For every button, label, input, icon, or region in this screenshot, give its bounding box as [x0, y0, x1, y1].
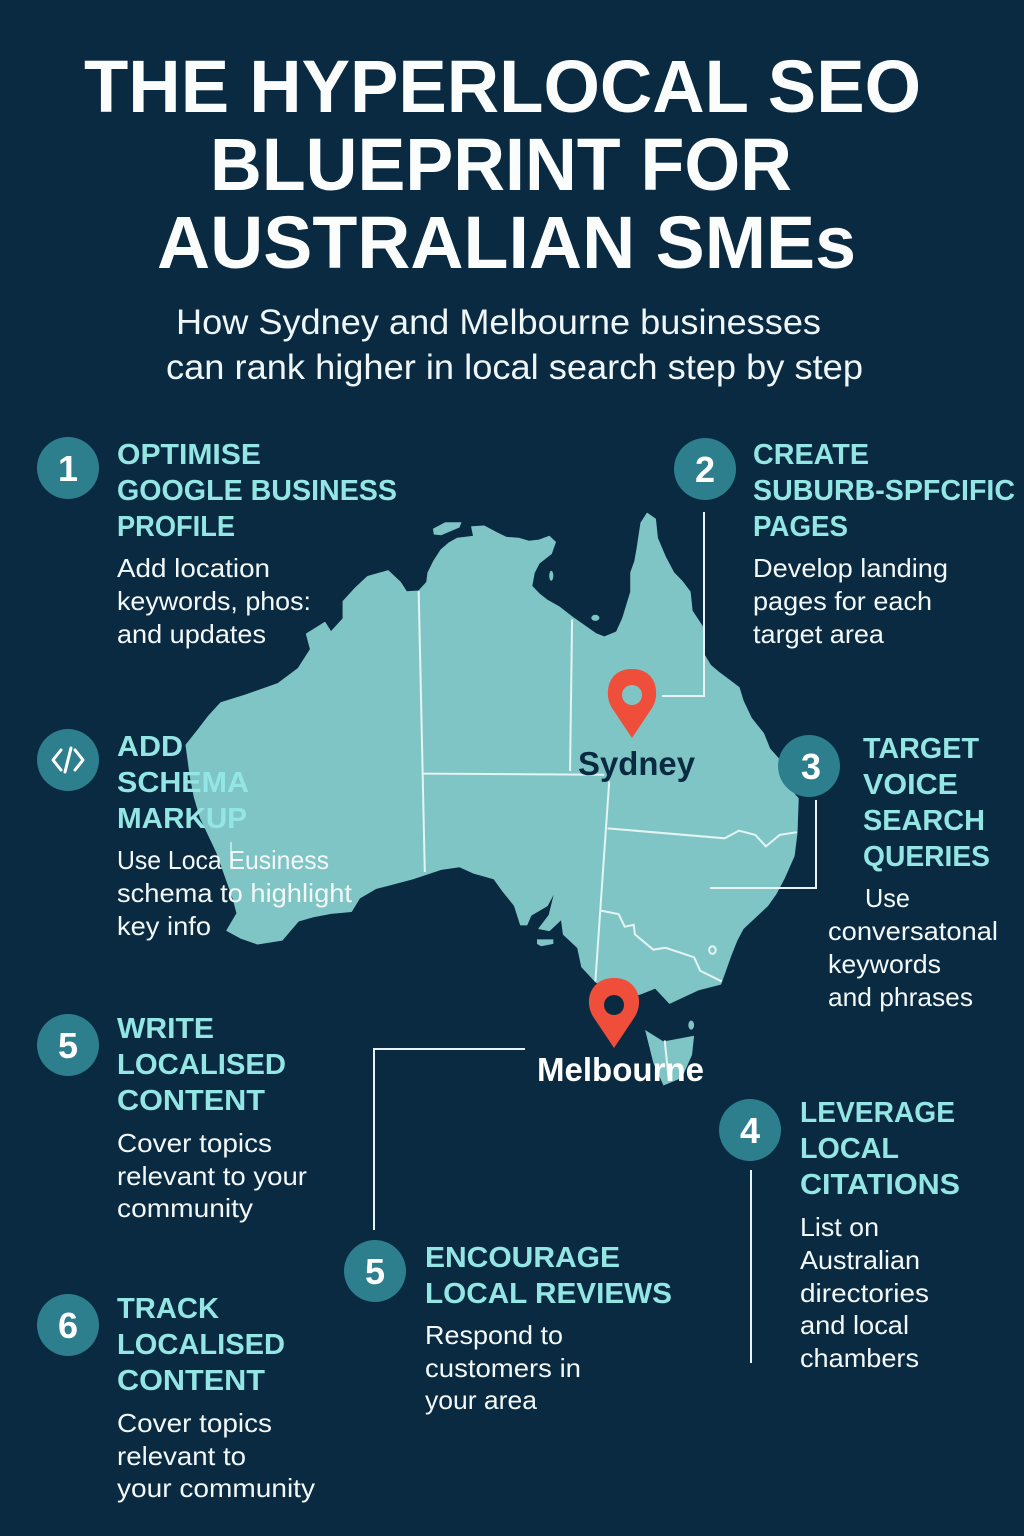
title: AUSTRALIAN SMEs: [157, 201, 856, 284]
title: THE HYPERLOCAL SEO: [84, 45, 921, 128]
icon: code brackets: [53, 748, 83, 772]
step 6: track localised content: 6: [58, 1305, 78, 1346]
step 5: write localised content: CONTENT: [117, 1085, 265, 1117]
step 4: leverage local citations: LOCAL: [800, 1133, 899, 1165]
step 1: optimise Google Business Profile: PROFILE: [117, 511, 235, 543]
step: add schema markup: [37, 729, 353, 941]
step 4: leverage local citations: chambers: [800, 1343, 919, 1373]
title: BLUEPRINT FOR: [210, 123, 792, 206]
step 2: create suburb-specific pages: target area: [753, 619, 885, 649]
step: add schema markup: Use Loca Eusiness: [117, 845, 329, 875]
stray tick on map: [230, 842, 232, 868]
subtitle: How Sydney and Melbourne businesses: [176, 303, 821, 342]
step 6: track localised content: your community: [117, 1473, 315, 1503]
step 4: leverage local citations: Australian: [800, 1245, 920, 1275]
title: [84, 45, 921, 284]
step: add schema markup: SCHEMA: [117, 767, 249, 799]
connector: Melbourne to step 5: [374, 1049, 525, 1230]
step 5: write localised content: [37, 1013, 307, 1223]
step 2: create suburb-specific pages: Develop landing: [753, 553, 948, 583]
label: Sydney: Sydney: [578, 745, 696, 782]
step 6: track localised content: TRACK: [117, 1293, 219, 1325]
step 4: leverage local citations: List on: [800, 1212, 879, 1242]
step 5: encourage local reviews: 5: [365, 1251, 385, 1292]
step 4: leverage local citations: directories: [800, 1278, 929, 1308]
pin: Melbourne: [589, 978, 639, 1048]
step 1: optimise Google Business Profile: keywords, phos:: [117, 586, 311, 616]
step 2: create suburb-specific pages: PAGES: [753, 511, 848, 543]
step 5: write localised content: Cover topics: [117, 1128, 272, 1158]
step 5: write localised content: WRITE: [117, 1013, 214, 1045]
step 5: encourage local reviews: [344, 1240, 672, 1415]
step 6: track localised content: relevant to: [117, 1441, 246, 1471]
step 1: optimise Google Business Profile: [37, 437, 397, 649]
step 5: encourage local reviews: LOCAL REVIEWS: [425, 1278, 672, 1310]
step: add schema markup: schema to highlight: [117, 878, 353, 908]
step 5: write localised content: relevant to your: [117, 1161, 307, 1191]
step 5: write localised content: LOCALISED: [117, 1049, 286, 1081]
step 3: target voice search queries: VOICE: [863, 769, 958, 801]
state borders: [419, 591, 797, 1080]
step 1: optimise Google Business Profile: OPTIMISE: [117, 439, 261, 471]
pin: Sydney: [608, 669, 656, 738]
islands: [433, 522, 694, 1086]
subtitle: can rank higher in local search step by step: [166, 348, 863, 387]
step 2: create suburb-specific pages: pages for each: [753, 586, 932, 616]
step 5: encourage local reviews: ENCOURAGE: [425, 1242, 620, 1274]
label: Melbourne: Melbourne: [537, 1051, 704, 1088]
step 3: target voice search queries: [778, 733, 998, 1012]
step 3: target voice search queries: SEARCH: [863, 805, 985, 837]
step 3: target voice search queries: 3: [801, 746, 821, 787]
step 6: track localised content: [37, 1293, 315, 1503]
step 1: optimise Google Business Profile: and updates: [117, 619, 266, 649]
step: add schema markup: ADD: [117, 731, 183, 763]
step 4: leverage local citations: 4: [740, 1110, 760, 1151]
step 3: target voice search queries: keywords: [828, 949, 941, 979]
step 3: target voice search queries: TARGET: [863, 733, 979, 765]
step 2: create suburb-specific pages: CREATE: [753, 439, 869, 471]
step 1: optimise Google Business Profile: Add location: [117, 553, 270, 583]
connector: step 4: [750, 1170, 752, 1363]
step 2: create suburb-specific pages: SUBURB-SPFCIFIC: [753, 475, 1015, 507]
step 3: target voice search queries: conversatonal: [828, 916, 998, 946]
step 6: track localised content: LOCALISED: [117, 1329, 285, 1361]
step 3: target voice search queries: and phrases: [828, 982, 973, 1012]
connector: step 3 to map: [710, 800, 816, 888]
step 5: encourage local reviews: Respond to: [425, 1320, 563, 1350]
step 5: write localised content: community: [117, 1193, 253, 1223]
step: add schema markup: MARKUP: [117, 803, 247, 835]
step 6: track localised content: Cover topics: [117, 1408, 272, 1438]
step 4: leverage local citations: and local: [800, 1310, 909, 1340]
step 2: create suburb-specific pages: [674, 438, 1015, 649]
step 5: encourage local reviews: your area: [425, 1385, 538, 1415]
step 5: encourage local reviews: customers in: [425, 1353, 581, 1383]
step 1: optimise Google Business Profile: 1: [58, 448, 78, 489]
step: add schema markup: key info: [117, 911, 211, 941]
step 5: write localised content: 5: [58, 1025, 78, 1066]
step 3: target voice search queries: QUERIES: [863, 841, 990, 873]
step 4: leverage local citations: LEVERAGE: [800, 1097, 955, 1129]
step 1: optimise Google Business Profile: GOOGLE BUSINESS: [117, 475, 397, 507]
connector: step 2 to Sydney: [662, 512, 704, 696]
step 4: leverage local citations: CITATIONS: [800, 1169, 960, 1201]
subtitle: [166, 303, 863, 387]
step 3: target voice search queries: Use: [865, 883, 910, 913]
step 4: leverage local citations: [719, 1097, 960, 1373]
map of Australia: [186, 513, 798, 1086]
step 6: track localised content: CONTENT: [117, 1365, 265, 1397]
step 2: create suburb-specific pages: 2: [695, 449, 715, 490]
